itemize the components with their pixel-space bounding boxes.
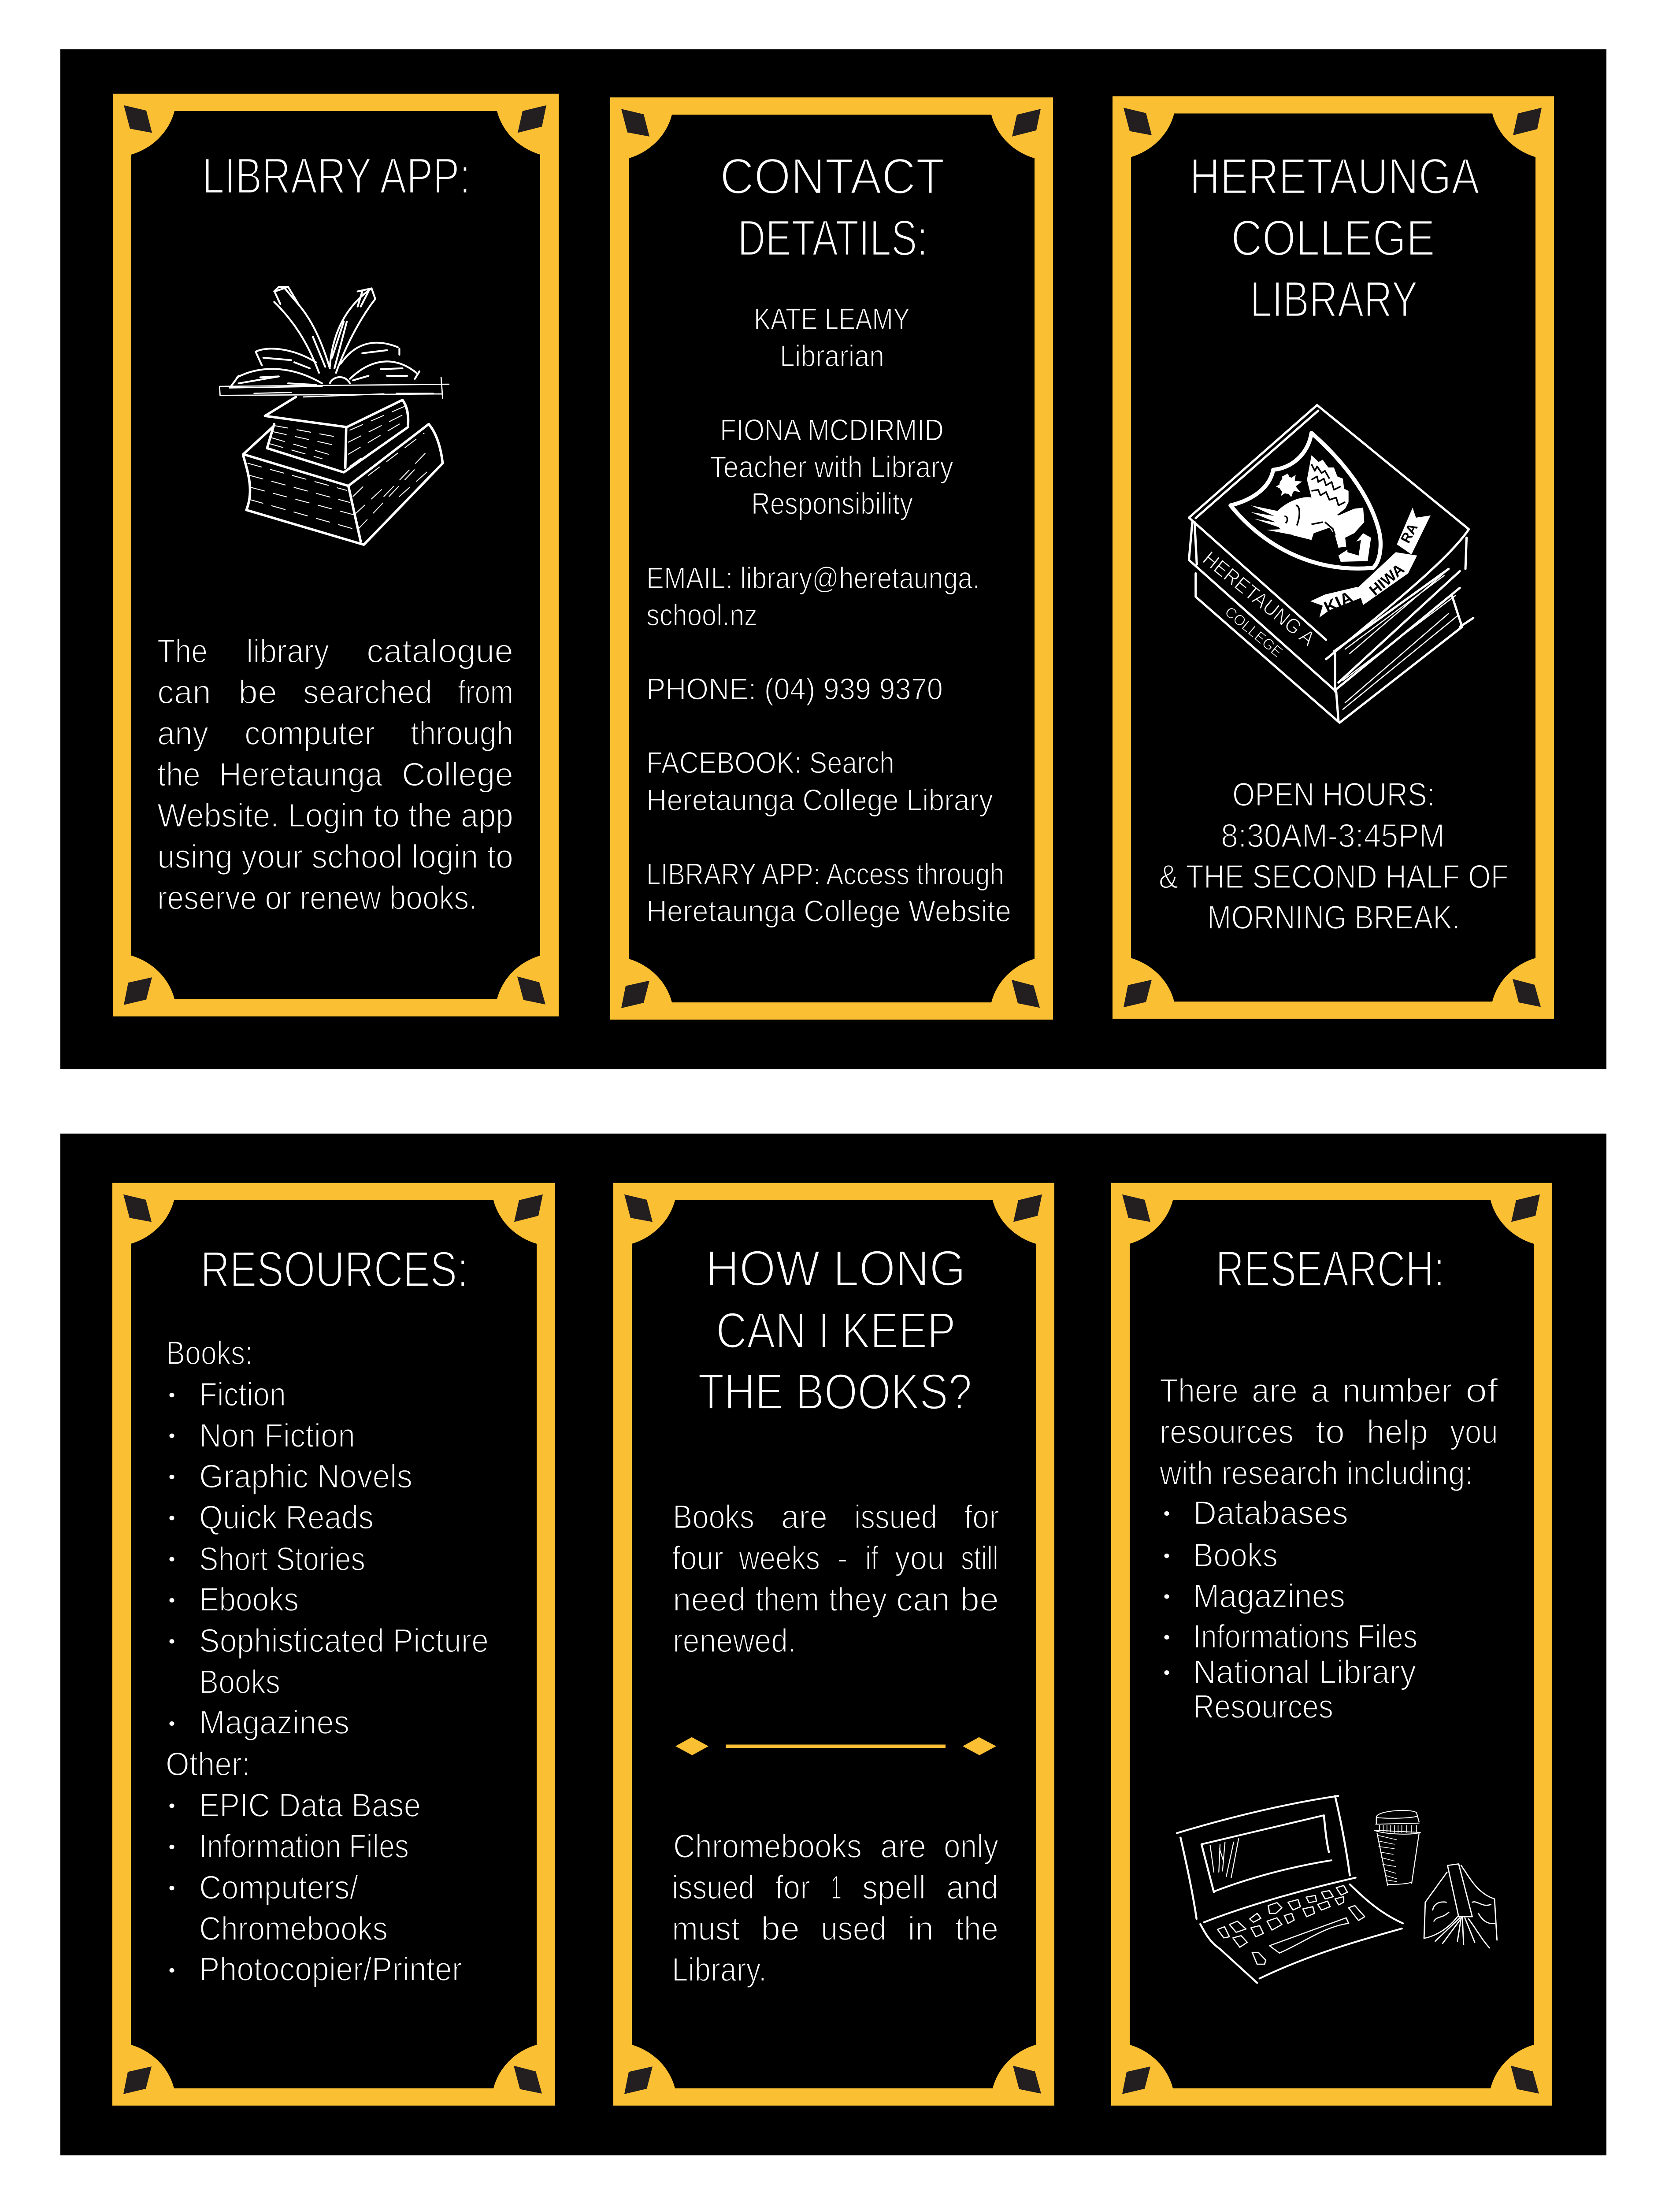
coffee cup [1375,1810,1420,1885]
crest shield [1231,433,1380,568]
text block: research intro: you [1450,1413,1498,1450]
text block: catalogue description: The [157,633,208,670]
panel: resources [112,1183,555,2106]
motto text: KIA [1321,588,1356,617]
text block: research intro [1159,1372,1498,1492]
text block: book loans: four [672,1540,723,1577]
icon: open book on stacked books [219,287,449,545]
text block: book loans [672,1498,999,1659]
text block: catalogue description: reserve or renew books. [157,879,477,916]
text block: book loans: can [896,1581,950,1618]
text block: chromebook loans: are [880,1828,926,1865]
panel: research [1111,1183,1552,2106]
text block: open hours [1159,776,1509,936]
spine lettering: COLLEGE [1222,603,1286,660]
list: research resources: National Library [1193,1654,1416,1691]
text block: catalogue description: using your school login to [157,838,513,875]
text block: contact channels: FACEBOOK: Search [646,745,894,779]
text block: catalogue description: catalogue [367,633,513,670]
text block: research intro: resources [1160,1413,1294,1450]
heading: contact details: DETATILS: [738,210,928,267]
list: books: Quick Reads [199,1499,374,1536]
text block: catalogue description [157,633,513,916]
list: books: Non Fiction [199,1417,355,1454]
list: books: Fiction [199,1376,286,1413]
text block: catalogue description: computer [245,715,375,752]
heading: how long can i keep the books: HOW LONG [705,1240,966,1297]
list: other: Chromebooks [199,1910,388,1947]
text block: catalogue description: can [157,674,211,711]
panel: how long can i keep the books [613,1183,1054,2106]
list: other: Information Files [199,1828,409,1865]
text block: staff names: Responsibility [751,486,913,520]
text block: research intro: are [1252,1372,1298,1409]
text block: catalogue description: Website. Login to the app [157,797,513,834]
text block: chromebook loans: in [908,1910,934,1947]
text block: chromebook loans: for [775,1869,810,1906]
divider with diamonds [675,1737,996,1755]
list: books: Magazines [199,1704,349,1741]
list: research resources: Resources [1193,1688,1333,1725]
text block: book loans: them [756,1581,819,1618]
motto text: HIWA [1366,560,1408,599]
text block: catalogue description: searched [303,674,432,711]
list: other: Photocopier/Printer [199,1951,462,1988]
text block: open hours: MORNING BREAK. [1207,899,1460,936]
heading: heretaunga college library: LIBRARY [1250,271,1418,328]
text block: open hours: OPEN HOURS: [1232,776,1435,813]
text block: chromebook loans: 1 [831,1869,842,1906]
list: books: Short Stories [199,1541,365,1578]
heading: heretaunga college library: COLLEGE [1231,210,1435,267]
heading: heretaunga college library: HERETAUNGA [1190,148,1480,205]
bottom black sheet [60,1134,1606,2155]
text block: contact channels [646,561,1011,928]
text block: contact channels: EMAIL: library@heretaunga. [646,561,980,595]
text block: research intro: There [1160,1372,1239,1409]
text block: chromebook loans: issued [672,1869,754,1906]
list: books: Graphic Novels [199,1458,412,1495]
text block: research intro: a [1311,1372,1330,1409]
open book [1424,1864,1497,1948]
text block: chromebook loans [672,1828,998,1988]
list: books: Books [199,1664,280,1701]
text block: staff names: FIONA MCDIRMID [720,413,944,447]
text block: book loans: are [781,1498,827,1535]
motto text: RA [1398,521,1421,545]
text block: book loans: - [837,1540,848,1577]
text block: book loans: weeks [738,1540,820,1577]
text block: chromebook loans: spell [862,1869,926,1906]
text block: contact channels: Heretaunga College Website [646,894,1011,928]
text block: research intro: help [1367,1413,1428,1450]
list: books: Books: [166,1335,253,1372]
text block: research intro: of [1465,1372,1498,1409]
heading: heretaunga college library [1190,148,1480,328]
text block: staff names [710,302,953,520]
text block: staff names: Teacher with Library [710,450,953,484]
heading: contact details [720,148,945,267]
list: books [166,1335,489,1741]
gold frame with corner ornaments [613,1183,1054,2106]
text block: book loans: still [961,1540,998,1577]
heading: how long can i keep the books [698,1240,972,1420]
icon: laptop, coffee cup and book [1177,1796,1497,1983]
panel: library app [113,94,559,1016]
text block: research intro: number [1343,1372,1452,1409]
list: other [166,1746,462,1988]
text block: contact channels: PHONE: (04) 939 9370 [646,672,943,706]
text block: book loans: if [865,1540,878,1577]
griffin feather details [1284,464,1345,535]
list: other: Other: [166,1746,250,1783]
text block: catalogue description: be [238,674,277,711]
text block: book loans: be [960,1581,999,1618]
text block: catalogue description: through [411,715,513,752]
heading: resources: RESOURCES: [200,1241,468,1298]
text block: catalogue description: Heretaunga [219,756,383,793]
text block: catalogue description: library [246,633,329,670]
text block: book loans: Books [673,1498,754,1535]
laptop [1177,1796,1403,1983]
top black sheet [60,49,1606,1069]
text block: chromebook loans: only [944,1828,998,1865]
list: books: Ebooks [199,1581,299,1618]
text block: research intro: with research including: [1159,1455,1473,1492]
gold frame with corner ornaments [113,94,559,1016]
motto ribbon [1310,508,1431,618]
text block: contact channels: school.nz [646,598,757,632]
text block: chromebook loans: must [672,1910,740,1947]
text block: catalogue description: from [458,674,513,711]
text block: book loans: they [829,1581,887,1618]
gold frame with corner ornaments [1111,1183,1552,2106]
text block: chromebook loans: and [946,1869,998,1906]
text block: open hours: 8:30AM-3:45PM [1221,817,1445,854]
text block: catalogue description: any [157,715,208,752]
motto text [1321,521,1421,617]
text block: chromebook loans: Chromebooks [673,1828,862,1865]
text block: chromebook loans: Library. [672,1951,767,1988]
text block: book loans: need [673,1581,746,1618]
gold frame with corner ornaments [1113,96,1554,1019]
spine lettering: HERETAUNG A [1198,547,1320,650]
text block: book loans: renewed. [673,1622,796,1659]
text block: contact channels: LIBRARY APP: Access through [646,857,1004,891]
list: other: EPIC Data Base [199,1787,421,1824]
text block: contact channels: Heretaunga College Library [646,783,993,817]
text block: catalogue description: the [157,756,200,793]
text block: staff names: KATE LEAMY [754,302,910,336]
heading: library app: LIBRARY APP: [202,148,471,204]
text block: chromebook loans: the [955,1910,998,1947]
heading: how long can i keep the books: THE BOOKS? [698,1364,972,1420]
griffin emblem [1251,455,1371,562]
text block: book loans: issued [854,1498,937,1535]
list: research resources: Databases [1193,1495,1348,1532]
text block: chromebook loans: be [761,1910,800,1947]
text block: catalogue description: College [402,756,513,793]
gold frame with corner ornaments [112,1183,555,2106]
text block: chromebook loans: used [821,1910,886,1947]
gold frame with corner ornaments [610,97,1053,1020]
heading: contact details: CONTACT [720,148,945,205]
icon: college crest on book stack [1189,405,1473,723]
text block: staff names: Librarian [780,339,884,373]
text block: book loans: you [895,1540,944,1577]
list: research resources: Magazines [1193,1578,1345,1615]
text block: book loans: for [964,1498,999,1535]
list: research resources: Books [1193,1537,1278,1574]
panel: contact details [610,97,1053,1020]
text block: open hours: & THE SECOND HALF OF [1159,858,1509,895]
heading: research: RESEARCH: [1216,1241,1445,1297]
list: other: Computers/ [199,1869,358,1906]
list: research resources: Informations Files [1193,1618,1417,1655]
text block: research intro: to [1316,1413,1345,1450]
panel: heretaunga college library [1113,96,1554,1019]
heading: how long can i keep the books: CAN I KEEP [716,1302,956,1359]
list: books: Sophisticated Picture [199,1622,489,1659]
list: research resources [1164,1495,1417,1725]
